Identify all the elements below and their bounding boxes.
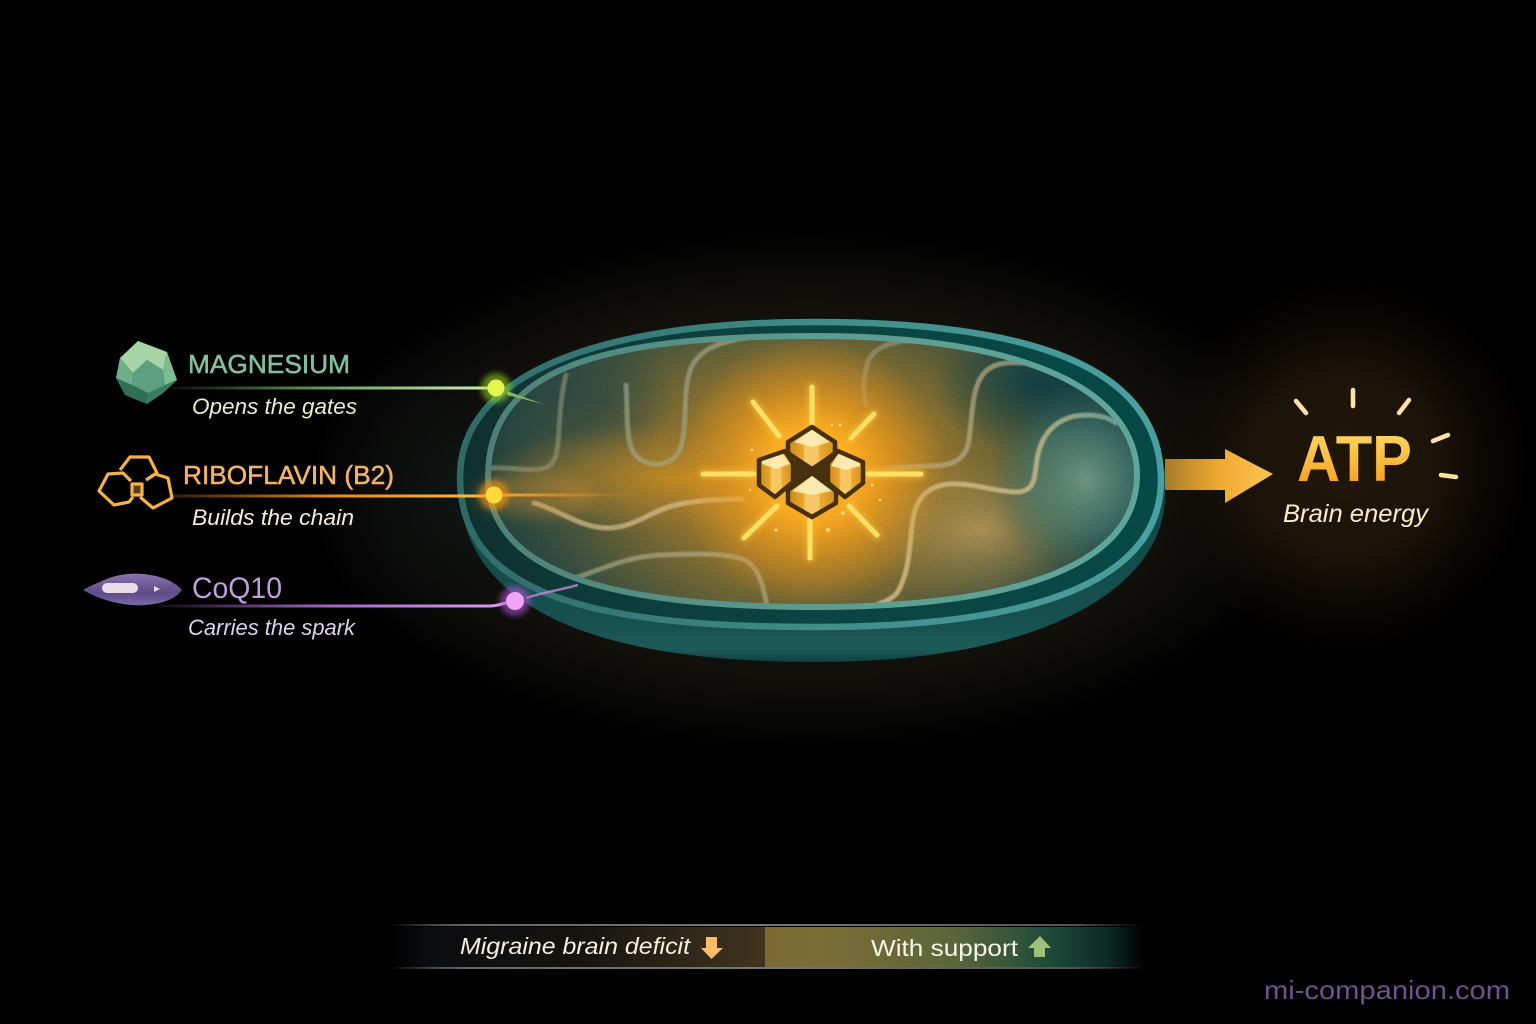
icon: coq10 capsule (83, 574, 182, 605)
matrix grain (492, 339, 1134, 604)
outer membrane body (460, 322, 1165, 662)
ATP caption: Brain energy (1283, 500, 1430, 528)
ATP heading: ATP (1297, 422, 1412, 495)
ATP burst ticks (1296, 390, 1456, 477)
label: magnesium: Opens the gates (192, 394, 357, 419)
bar right: support: With support (871, 935, 1019, 961)
label: coq10: Carries the spark (188, 615, 356, 640)
watermark: mi-companion.com (1264, 975, 1510, 1005)
ATP synthase core (676, 337, 946, 607)
label: magnesium (188, 349, 357, 419)
energy rays (703, 387, 921, 558)
coq10 connector (155, 585, 578, 616)
crystal bottom (788, 473, 836, 517)
panel: mitochondrion (460, 315, 1180, 662)
icon: riboflavin rings (99, 457, 172, 508)
sparks (749, 424, 881, 532)
bar right: support (765, 927, 1145, 968)
inner membrane (488, 336, 1137, 607)
label: riboflavin (183, 460, 394, 530)
infographic canvas (83, 262, 1508, 1004)
arrow: output to ATP (1165, 449, 1273, 503)
crystal right (828, 451, 863, 497)
background glow (300, 230, 1535, 750)
cristae folds (492, 337, 1116, 606)
icon: magnesium gem (116, 341, 177, 404)
crystal left (759, 451, 793, 497)
comparison bar (390, 924, 1145, 969)
crystal top (788, 427, 835, 469)
energy rays glow (703, 387, 921, 558)
matrix interior (491, 339, 1134, 604)
left membrane glow (475, 473, 595, 517)
bar left: deficit: Migraine brain deficit (460, 933, 692, 959)
label: coq10 (188, 572, 356, 640)
riboflavin connector (172, 480, 640, 510)
label: riboflavin: Builds the chain (192, 505, 354, 530)
hexagon crystals (759, 427, 863, 517)
label: magnesium: MAGNESIUM (188, 349, 350, 379)
label: coq10: CoQ10 (192, 572, 282, 605)
label: riboflavin: RIBOFLAVIN (B2) (183, 460, 394, 490)
bar left: deficit (390, 927, 765, 968)
magnesium connector (172, 373, 543, 404)
core glow (676, 337, 946, 607)
